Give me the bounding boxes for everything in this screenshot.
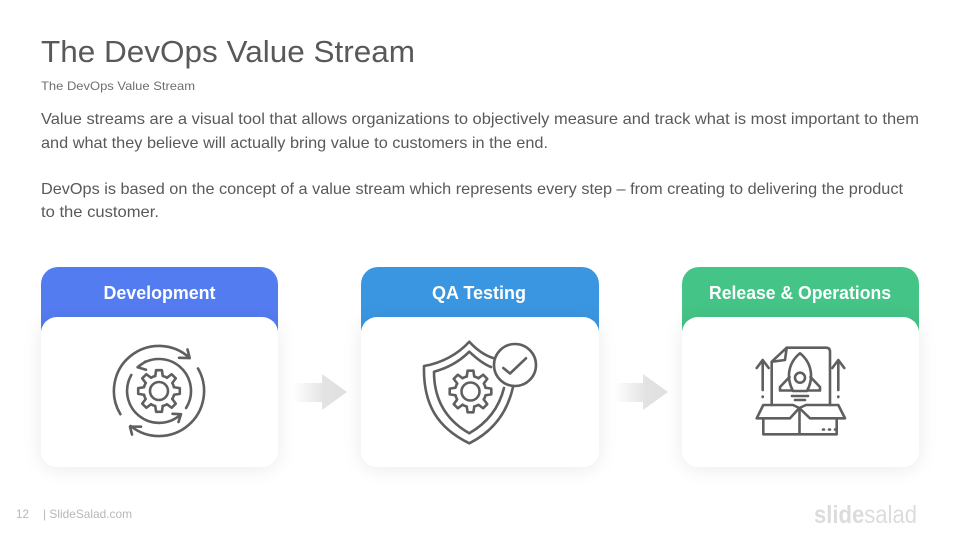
text block: value streams intro bbox=[41, 111, 919, 152]
panel: QA Testing bbox=[361, 267, 599, 467]
text block: DevOps concept: to the customer. bbox=[41, 204, 159, 221]
header: QA Testing bbox=[361, 267, 599, 347]
header: Development: Development bbox=[104, 283, 216, 303]
panel: Release & Operations bbox=[682, 267, 919, 467]
text block: value streams intro: Value streams are a visual tool that allows organizations to objectively measure and track what is most important to them bbox=[41, 111, 919, 128]
title: The DevOps Value Stream bbox=[41, 34, 415, 69]
page number: 12 bbox=[16, 507, 29, 521]
text block: DevOps concept bbox=[41, 181, 904, 221]
card body: Development bbox=[41, 317, 278, 467]
header: Development bbox=[41, 267, 278, 347]
icon: rocket launching from box bbox=[757, 348, 845, 434]
arrow: Development to QA Testing bbox=[293, 374, 347, 410]
panel: Development bbox=[41, 267, 278, 467]
arrow: QA Testing to Release bbox=[614, 374, 668, 410]
icon: shield with gear and check bbox=[424, 342, 536, 443]
text block: value streams intro: and what they believe will actually bring value to customers in the end. bbox=[41, 135, 548, 152]
header: QA Testing: QA Testing bbox=[432, 283, 526, 303]
text block: DevOps concept: DevOps is based on the concept of a value stream which represents every step – from creating to delivering the product bbox=[41, 181, 904, 198]
header: Release & Operations: Release & Operations bbox=[709, 283, 891, 303]
card body: Release & Operations bbox=[682, 317, 919, 467]
footer source: | SlideSalad.com bbox=[43, 507, 132, 521]
header: Release & Operations bbox=[682, 267, 919, 347]
logo: slidesalad: slidesalad bbox=[814, 501, 917, 529]
subtitle: The DevOps Value Stream bbox=[41, 79, 195, 93]
icon: gear with cycle arrows bbox=[114, 346, 204, 436]
card body: QA Testing bbox=[361, 317, 599, 467]
